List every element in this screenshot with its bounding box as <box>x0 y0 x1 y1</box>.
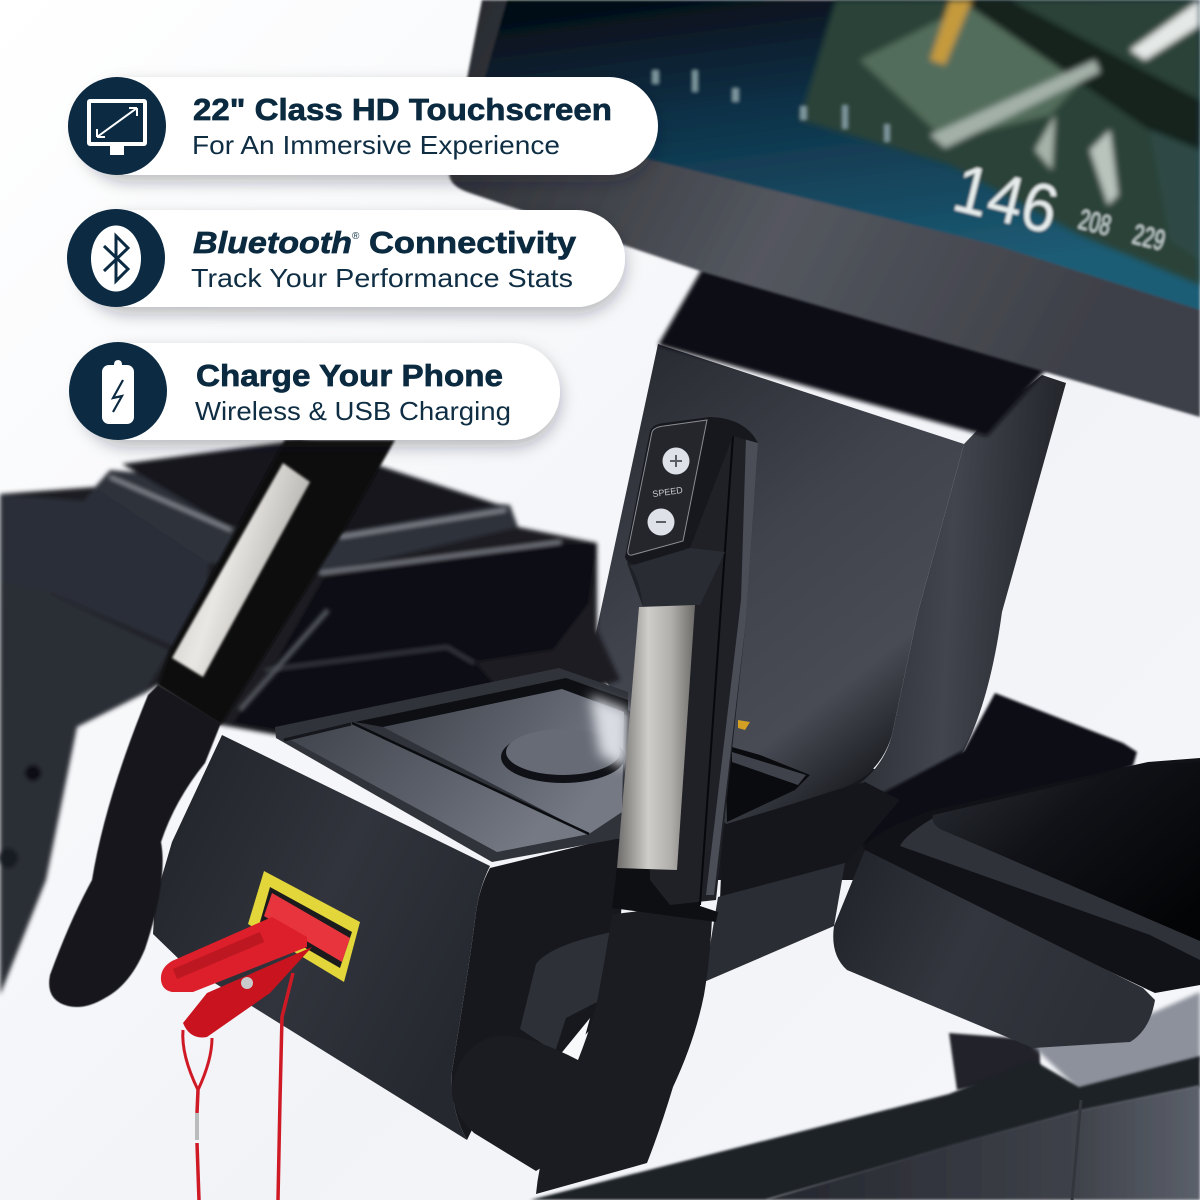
monitor <box>449 0 1200 417</box>
red clip upper <box>161 917 307 992</box>
wireless charging disc <box>501 729 625 783</box>
rail top band <box>1033 992 1200 1090</box>
stat 229: 229 <box>1129 219 1168 258</box>
holder lower face <box>833 850 1155 1048</box>
collar <box>612 868 718 922</box>
icon: bluetooth <box>67 209 165 307</box>
pill background <box>80 77 658 175</box>
console base fill <box>620 660 900 880</box>
deck gap <box>355 678 628 727</box>
grip column <box>627 417 758 905</box>
heading: 22" Class HD Touchscreen <box>193 92 612 127</box>
yellow tag <box>738 720 750 730</box>
neck wall <box>590 344 964 825</box>
right bin <box>233 543 597 730</box>
grip neck <box>630 548 725 607</box>
bottom right frame <box>530 992 1200 1200</box>
tube highlight <box>240 610 328 710</box>
subheading: Wireless & USB Charging <box>195 396 511 426</box>
pad panel <box>383 689 624 834</box>
holder inner rim <box>900 790 1200 960</box>
left panel dot <box>25 765 41 781</box>
clip rivet <box>241 977 253 989</box>
heading: Connectivity <box>369 225 577 260</box>
side seam <box>700 436 733 905</box>
reflection <box>590 695 628 770</box>
holder inside <box>933 762 1200 941</box>
tray base fill <box>0 487 620 735</box>
yellow bezel <box>248 871 360 982</box>
right face of body <box>452 835 625 1140</box>
neck <box>590 262 1066 825</box>
screen stat readouts <box>652 70 1168 258</box>
left steel sleeve <box>172 463 310 677</box>
heading: Bluetooth <box>193 225 352 260</box>
pill background <box>80 343 560 440</box>
neck pillar <box>830 375 1066 815</box>
heading: ® <box>352 231 360 242</box>
heading: Charge Your Phone <box>196 358 503 393</box>
right cup holder <box>833 758 1200 1048</box>
slot <box>260 887 352 968</box>
left panel <box>0 570 170 995</box>
grip head <box>625 417 758 564</box>
frame post <box>949 1033 1040 1090</box>
light side strip <box>706 437 758 895</box>
screen <box>475 0 1200 310</box>
screen picture <box>800 0 1200 285</box>
compartment slot <box>732 752 806 785</box>
left grip <box>49 440 395 1007</box>
red clip lower <box>183 947 312 1037</box>
cord tail <box>197 1090 199 1200</box>
subheading: Track Your Performance Stats <box>191 263 573 293</box>
feature pill: bluetooth <box>67 209 625 307</box>
left panel knob <box>0 848 18 868</box>
front face <box>153 735 490 1140</box>
outer lip <box>95 470 518 573</box>
rim highlight <box>110 477 506 537</box>
grip ribs <box>175 937 262 974</box>
speed label: SPEED <box>652 485 684 499</box>
holder dark base <box>865 758 1200 993</box>
plus button <box>662 448 690 474</box>
panel rim <box>284 724 351 740</box>
stat 208: 208 <box>1075 204 1114 243</box>
bin lower outline <box>265 647 474 670</box>
recess opening <box>559 1018 590 1062</box>
deck surface <box>275 668 628 862</box>
speed control panel <box>628 420 707 555</box>
black mesh compartment <box>725 745 810 822</box>
cord clamp <box>195 1113 199 1140</box>
flat panel <box>287 723 589 852</box>
cord loop <box>183 1030 212 1090</box>
bin lip highlight <box>320 542 561 573</box>
metric digits <box>652 70 890 142</box>
cord right <box>278 973 293 1200</box>
rail seam <box>1072 1100 1081 1200</box>
tray inside <box>122 440 500 533</box>
panel divider <box>352 723 589 834</box>
panel face <box>628 420 707 555</box>
right steel sleeve <box>617 605 695 870</box>
left foam handle <box>49 685 221 1007</box>
red switch <box>264 893 350 962</box>
console body <box>153 668 900 1140</box>
minus button <box>648 508 674 536</box>
right side lower face <box>704 863 845 982</box>
icon: monitor <box>68 77 166 175</box>
right side dark band <box>720 782 900 900</box>
upper tube <box>158 440 395 725</box>
rail face <box>765 1085 1200 1200</box>
large tray wall <box>0 487 230 660</box>
pill background <box>80 210 625 307</box>
left background tray <box>0 440 620 995</box>
horizontal foam end <box>452 1036 610 1171</box>
rail dark band <box>530 1056 1200 1200</box>
heart rate 146: 146 <box>946 150 1066 249</box>
icon: battery <box>69 342 167 440</box>
safety key <box>161 871 360 1200</box>
foam handle <box>536 911 712 1194</box>
feature pill: charging <box>69 342 560 440</box>
right grip <box>452 417 758 1194</box>
back right tray <box>850 693 1137 860</box>
monitor frame <box>449 0 1200 417</box>
recess <box>520 932 612 1052</box>
neck top ledge <box>658 262 1050 436</box>
feature pill: touchscreen <box>68 77 658 175</box>
subheading: For An Immersive Experience <box>192 130 560 160</box>
heading <box>193 225 577 260</box>
